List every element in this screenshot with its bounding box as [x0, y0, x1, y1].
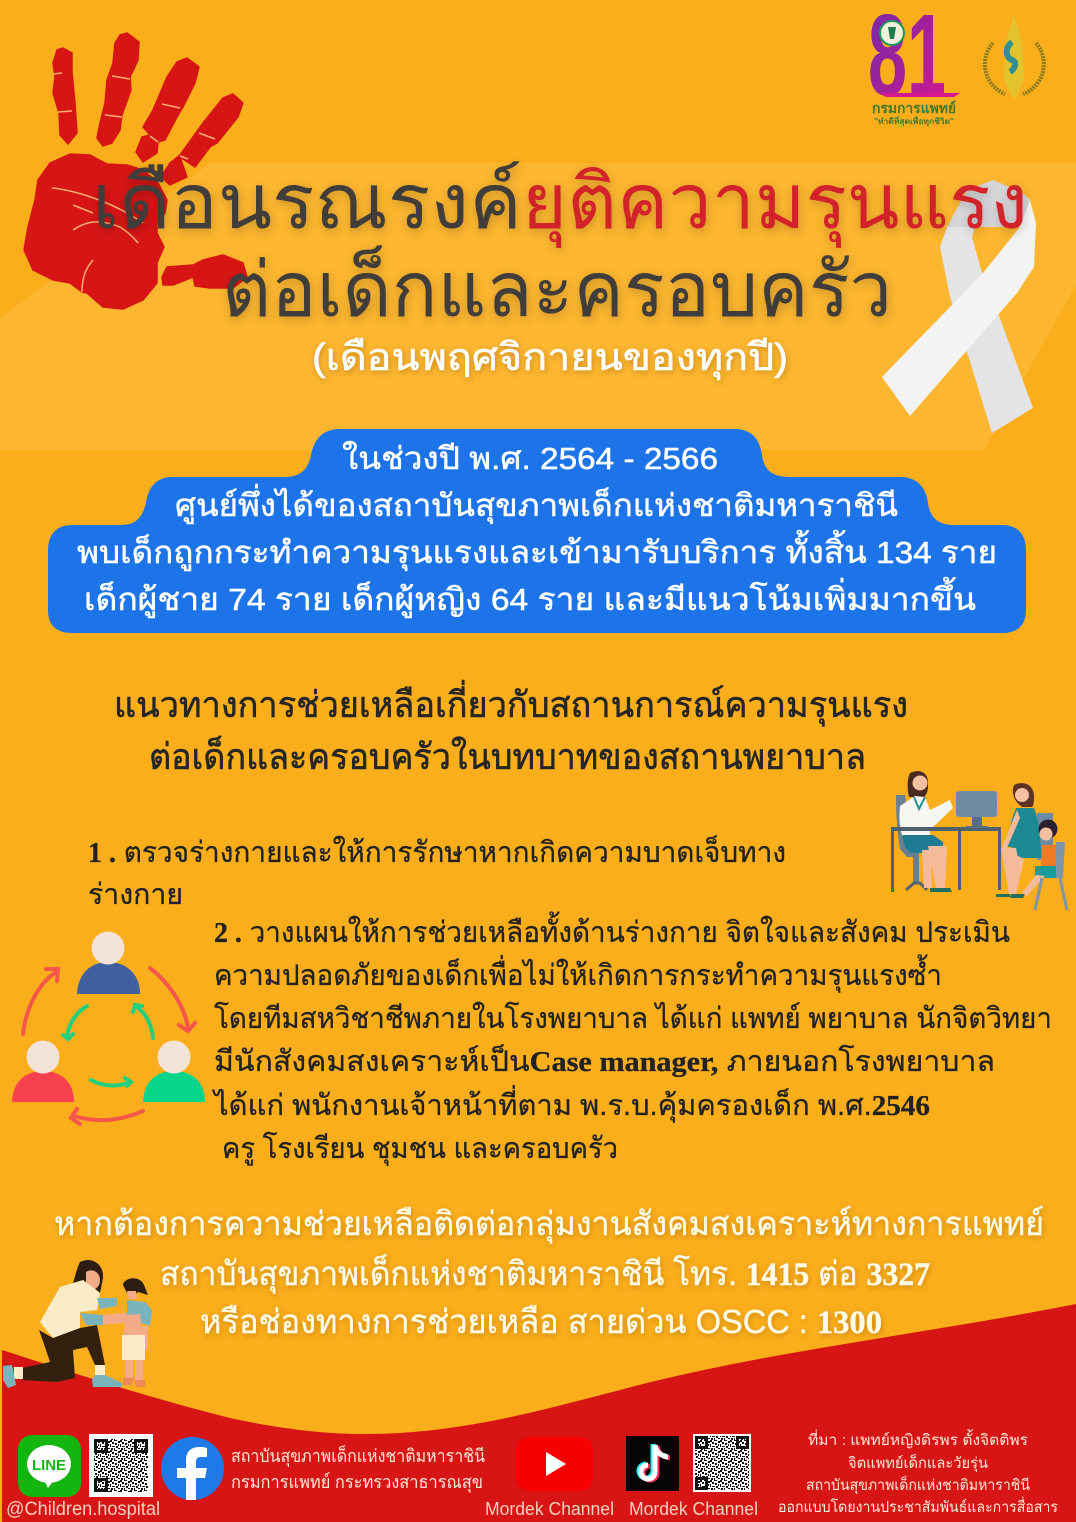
text: step 2 — [212, 911, 1052, 1166]
text: contact information: สถาบันสุขภาพเด็กแห่งชาติมหาราชินี โทร. 1415 ต่อ 3327 — [160, 1254, 930, 1294]
lighter title band — [0, 163, 1076, 450]
text: step 1: 1 . ตรวจร่างกายและให้การรักษาหากเกิดความบาดเจ็บทาง — [88, 834, 786, 869]
icon: LINE — [18, 1435, 81, 1497]
text: contact information: หากต้องการความช่วยเหลือติดต่อกลุ่มงานสังคมสงเคราะห์ทางการแพทย์ — [54, 1205, 1044, 1244]
icon: doctor examining child — [3, 1260, 152, 1388]
text: youtube channel: Mordek Channel — [485, 1499, 614, 1519]
icon: red hand print — [24, 33, 247, 309]
icon: LINE: LINE — [32, 1457, 66, 1474]
panel: blue statistic callout: ศูนย์พึ่งได้ของสถาบันสุขภาพเด็กแห่งชาติมหาราชินี — [175, 484, 898, 525]
text: credits — [778, 1429, 1058, 1516]
panel: blue statistic callout: เด็กผู้ชาย 74 ราย เด็กผู้หญิง 64 ราย และมีแนวโน้มเพิ่มมากขึ้น — [84, 577, 976, 618]
logo: 81 department of medical services — [868, 0, 960, 127]
title — [92, 160, 1028, 333]
logo: 81 department of medical services: "ทำดีที่สุดเพื่อทุกชีวิต" — [874, 115, 954, 127]
panel: blue statistic callout: พบเด็กถูกกระทำความรุนแรงและเข้ามารับบริการ ทั้งสิ้น 134 ราย — [77, 530, 997, 572]
text: credits: จิตแพทย์เด็กและวัยรุ่น — [848, 1453, 988, 1473]
text: step 2: ได้แก่ พนักงานเจ้าหน้าที่ตาม พ.ร.บ.คุ้มครองเด็ก พ.ศ.2546 — [212, 1085, 930, 1123]
text: step 2: ความปลอดภัยของเด็กเพื่อไม่ให้เกิดการกระทำความรุนแรงซ้ำ — [214, 954, 942, 993]
text: step 1: ร่างกาย — [88, 879, 183, 911]
red footer wave — [2, 1304, 1076, 1522]
icon: multidisciplinary team cycle — [12, 932, 205, 1124]
logo: 81 department of medical services: กรมการแพทย์ — [872, 100, 956, 116]
logo: institute emblem — [985, 15, 1044, 100]
icon: doctor with mother and child — [891, 771, 1067, 910]
heading: guidance — [114, 680, 908, 777]
text: credits: ที่มา : แพทย์หญิงดิรพร ตั้งจิตติพร — [808, 1429, 1028, 1449]
text: step 2: ครู โรงเรียน ชุมชน และครอบครัว — [222, 1131, 618, 1166]
icon: white ribbon — [882, 180, 1036, 433]
text: step 2: โดยทีมสหวิชาชีพภายในโรงพยาบาล ได้แก่ แพทย์ พยาบาล นักจิตวิทยา — [214, 1001, 1052, 1035]
icon: TikTok — [626, 1436, 679, 1491]
subtitle: (เดือนพฤศจิกายนของทุกปี) — [312, 337, 788, 380]
icon: LINE QR code — [89, 1434, 153, 1497]
text: step 2: มีนักสังคมสงเคราะห์เป็น Case manager, ภายนอกโรงพยาบาล — [214, 1043, 995, 1078]
text: step 1 — [88, 834, 786, 911]
title: ยุติความรุนแรง — [522, 160, 1028, 248]
icon: Facebook — [161, 1437, 224, 1500]
text: contact information: หรือช่องทางการช่วยเหลือ สายด่วน OSCC : 1300 — [200, 1303, 882, 1341]
text: institute name: กรมการแพทย์ กระทรวงสาธารณสุข — [231, 1472, 483, 1493]
heading: guidance: ต่อเด็กและครอบครัวในบทบาทของสถานพยาบาล — [149, 734, 866, 777]
heading: guidance: แนวทางการช่วยเหลือเกี่ยวกับสถานการณ์ความรุนแรง — [114, 680, 908, 727]
text: step 2: 2 . วางแผนให้การช่วยเหลือทั้งด้านร่างกาย จิตใจและสังคม ประเมิน — [214, 911, 1010, 949]
text: institute name: สถาบันสุขภาพเด็กแห่งชาติมหาราชินี — [231, 1444, 485, 1467]
panel: blue statistic callout — [48, 429, 1026, 633]
panel: blue statistic callout: ในช่วงปี พ.ศ. 2564 - 2566 — [342, 441, 718, 476]
text: credits: ออกแบบโดยงานประชาสัมพันธ์และการสื่อสาร — [778, 1496, 1058, 1516]
icon: TikTok QR code — [693, 1434, 751, 1492]
title: ต่อเด็กและครอบครัว — [222, 245, 892, 333]
text: contact information — [54, 1205, 1044, 1341]
text: tiktok channel: Mordek Channel — [629, 1499, 758, 1519]
text: line handle: @Children.hospital — [6, 1499, 160, 1520]
text: institute name — [231, 1444, 485, 1493]
title: เดือนรณรงค์ — [92, 160, 522, 245]
text: credits: สถาบันสุขภาพเด็กแห่งชาติมหาราชินี — [806, 1475, 1030, 1495]
icon: YouTube — [516, 1437, 593, 1491]
